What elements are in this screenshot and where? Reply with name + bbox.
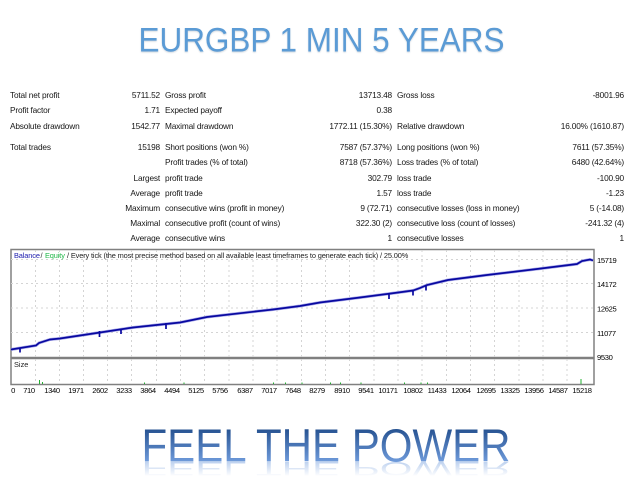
row: average trade (130, 188, 625, 198)
bottom axis labels: 1971 (68, 386, 84, 395)
row: total trades: Short positions (won %) (165, 142, 249, 152)
bottom axis labels: 12064 (451, 386, 471, 395)
row: average consecutive: 1 (620, 233, 625, 243)
bottom axis labels: 0 (11, 386, 15, 395)
right axis labels (597, 256, 616, 362)
row: maximum consecutive: Maximum (125, 203, 160, 213)
row: maximum consecutive: consecutive losses (loss in money) (397, 203, 520, 213)
bottom axis labels: 14587 (548, 386, 568, 395)
row: profit trades: 6480 (42.64%) (572, 157, 624, 167)
row: total net profit: Gross loss (397, 90, 435, 100)
row: maximum consecutive (125, 203, 624, 213)
bottom axis labels: 8910 (334, 386, 350, 395)
size bars (40, 379, 581, 384)
row: total trades: 7587 (57.37%) (340, 142, 392, 152)
bottom axis labels: 5125 (188, 386, 204, 395)
bottom axis labels: 3233 (116, 386, 132, 395)
row: profit factor: 0.38 (377, 105, 393, 115)
bottom axis labels: 12695 (476, 386, 496, 395)
bottom axis labels (11, 386, 592, 395)
slogan reflection: FEEL THE POWER (142, 458, 510, 480)
right axis labels: 12625 (597, 304, 616, 314)
equity line (11, 260, 593, 350)
row: maximum consecutive: 9 (72.71) (360, 203, 392, 213)
row: average trade: 1.57 (377, 188, 393, 198)
row: profit factor: 1.71 (145, 105, 161, 115)
bottom axis labels: 11433 (428, 386, 447, 395)
size panel (11, 358, 594, 384)
row: maximal consecutive: -241.32 (4) (585, 218, 624, 228)
row: absolute drawdown: 1542.77 (131, 121, 161, 131)
row: total net profit: 5711.52 (132, 90, 161, 100)
chart legend: / Every tick (the most precise method based on all available least timeframes to generate each tick) / 25.00% (67, 251, 409, 260)
row: maximal consecutive (130, 218, 624, 228)
right axis labels: 9530 (597, 353, 613, 362)
row: profit factor: Expected payoff (165, 105, 223, 115)
row: total trades: Total trades (10, 142, 51, 152)
row: average trade: loss trade (397, 188, 432, 198)
row: total trades: Long positions (won %) (397, 142, 480, 152)
row: average consecutive: consecutive losses (397, 233, 464, 243)
balance chart (11, 250, 616, 362)
bottom axis labels: 13956 (524, 386, 544, 395)
row: largest trade: profit trade (165, 173, 203, 183)
bottom axis labels: 7017 (261, 386, 277, 395)
row: total net profit: Gross profit (165, 90, 207, 100)
bottom axis labels: 10171 (378, 386, 398, 395)
row: profit factor: Profit factor (10, 105, 51, 115)
row: maximum consecutive: consecutive wins (profit in money) (165, 203, 285, 213)
row: profit trades: Profit trades (% of total) (165, 157, 248, 167)
row: maximal consecutive: 322.30 (2) (356, 218, 392, 228)
right axis labels: 15719 (597, 256, 616, 265)
statistics table (10, 90, 625, 243)
right axis labels: 11077 (597, 329, 616, 338)
bottom axis labels: 3864 (140, 386, 156, 395)
row: largest trade: loss trade (397, 173, 432, 183)
row: average consecutive: Average (130, 233, 161, 243)
row: maximal consecutive: Maximal (130, 218, 160, 228)
bottom axis labels: 4494 (164, 386, 180, 395)
bottom axis labels: 13325 (500, 386, 520, 395)
row: absolute drawdown: 16.00% (1610.87) (561, 121, 624, 131)
row: absolute drawdown: Maximal drawdown (165, 121, 234, 131)
row: absolute drawdown (10, 121, 624, 131)
chart legend: / (40, 251, 44, 260)
title: EURGBP 1 MIN 5 YEARS (138, 22, 504, 60)
bottom axis labels: 6387 (237, 386, 253, 395)
row: average trade: profit trade (165, 188, 203, 198)
row: profit trades: 8718 (57.36%) (340, 157, 392, 167)
chart legend: Balance (14, 251, 40, 260)
title: EURGBP 1 MIN 5 YEARS (138, 22, 504, 60)
row: total net profit: Total net profit (10, 90, 60, 100)
row: average consecutive: 1 (388, 233, 393, 243)
chart legend: Equity (45, 251, 65, 260)
row: maximal consecutive: consecutive loss (count of losses) (397, 218, 516, 228)
row: absolute drawdown: 1772.11 (15.30%) (329, 121, 392, 131)
row: average consecutive: consecutive wins (165, 233, 225, 243)
row: profit factor (10, 105, 393, 115)
bottom axis labels: 9541 (358, 386, 374, 395)
bottom axis labels: 7648 (285, 386, 301, 395)
row: total net profit (10, 90, 625, 100)
row: total net profit: 13713.48 (359, 90, 393, 100)
row: maximal consecutive: consecutive profit (count of wins) (165, 218, 280, 228)
row: largest trade (134, 173, 625, 183)
balance line (11, 260, 593, 352)
bottom axis labels: 710 (23, 386, 35, 395)
row: profit trades: Loss trades (% of total) (397, 157, 479, 167)
row: profit trades (165, 157, 624, 167)
right axis labels: 14172 (597, 280, 616, 289)
row: maximum consecutive: 5 (-14.08) (590, 203, 624, 213)
row: total trades (10, 142, 624, 152)
bottom axis labels: 10802 (403, 386, 423, 395)
bottom axis labels: 1340 (44, 386, 60, 395)
row: average trade: -1.23 (606, 188, 625, 198)
row: largest trade: -100.90 (597, 173, 625, 183)
slogan: FEEL THE POWER (142, 420, 510, 472)
row: average trade: Average (130, 188, 161, 198)
row: total trades: 7611 (57.35%) (572, 142, 624, 152)
row: total trades: 15198 (138, 142, 161, 152)
row: average consecutive (130, 233, 625, 243)
bottom axis labels: 5756 (212, 386, 228, 395)
size label: Size (14, 360, 28, 369)
bottom axis labels: 15218 (572, 386, 592, 395)
bottom axis labels: 8279 (309, 386, 325, 395)
row: largest trade: Largest (134, 173, 161, 183)
row: absolute drawdown: Absolute drawdown (10, 121, 80, 131)
row: total net profit: -8001.96 (593, 90, 625, 100)
bottom axis labels: 2602 (92, 386, 108, 395)
row: largest trade: 302.79 (368, 173, 393, 183)
row: absolute drawdown: Relative drawdown (397, 121, 465, 131)
